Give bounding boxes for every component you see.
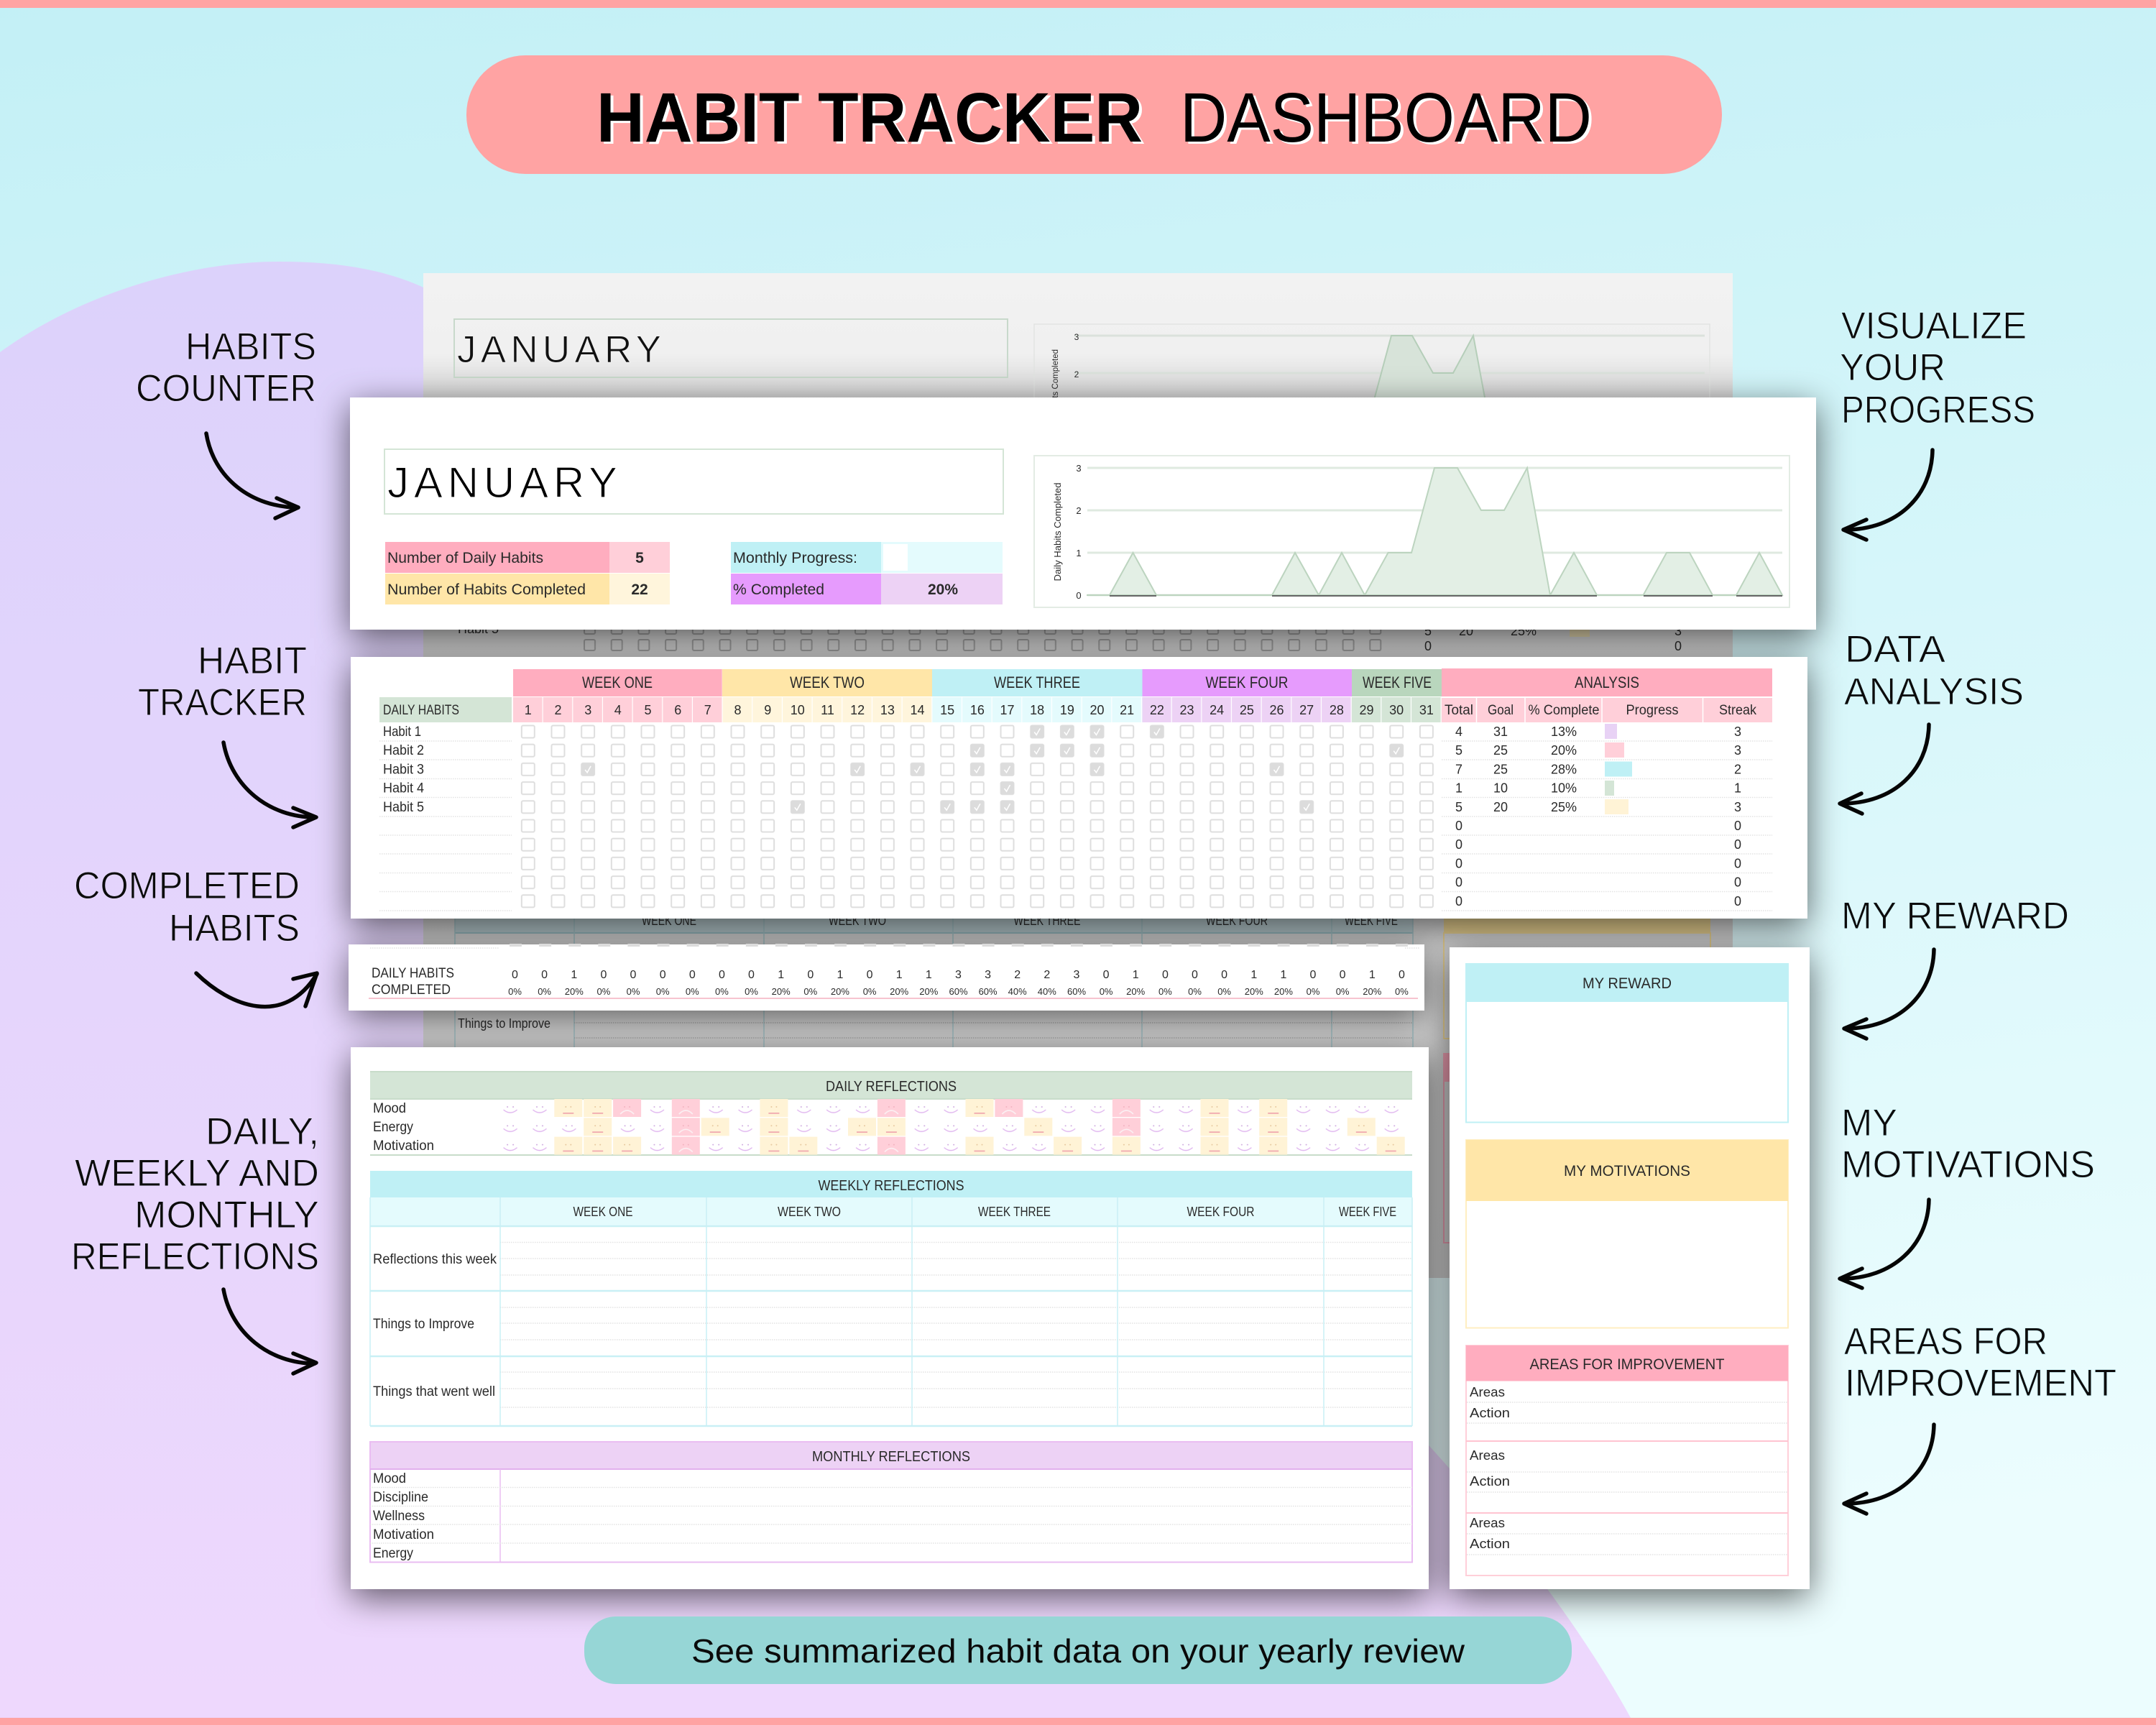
analysis values: 25% xyxy=(1551,800,1577,814)
week two header xyxy=(722,669,932,722)
analysis values: 1 xyxy=(1734,781,1741,795)
analysis values: 0 xyxy=(1455,857,1462,871)
analysis values: 4 xyxy=(1455,724,1462,739)
completed percentages: 60% xyxy=(979,986,998,997)
day numbers: 31 xyxy=(1419,703,1434,717)
day numbers: 7 xyxy=(704,703,711,717)
my reward box xyxy=(1466,964,1788,1123)
habit names: Habit 5 xyxy=(383,800,424,815)
back areas box xyxy=(1444,1054,1473,1243)
completed counts: 0 xyxy=(1192,969,1198,981)
habit names: Habit 2 xyxy=(383,743,424,758)
panel: habits counter and chart xyxy=(350,397,1816,630)
completed percentages: 0% xyxy=(1336,986,1350,997)
day numbers: 4 xyxy=(614,703,622,717)
completed counts: 0 xyxy=(1340,969,1346,981)
analysis values: 10 xyxy=(1493,781,1508,795)
analysis values: 3 xyxy=(1734,724,1741,739)
stat: monthly progress xyxy=(731,542,1003,573)
monthly reflections xyxy=(370,1442,1412,1563)
back things to improve row xyxy=(458,1016,1413,1038)
stat: number of habits completed xyxy=(385,574,670,604)
day numbers: 25 xyxy=(1240,703,1254,717)
daily reflections xyxy=(370,1072,1412,1156)
completed counts: 0 xyxy=(1162,969,1169,981)
back things to improve row: Things to Improve xyxy=(458,1016,550,1031)
analysis header xyxy=(1442,668,1772,722)
analysis values: 5 xyxy=(1455,743,1462,758)
weekly column headers: WEEK FIVE xyxy=(1339,1205,1396,1219)
completed counts: 1 xyxy=(837,969,843,981)
completed percentages: 0% xyxy=(1307,986,1320,997)
bottom border strip xyxy=(0,1718,2156,1725)
monthly row labels: Motivation xyxy=(373,1527,434,1542)
label: areas for improvement xyxy=(1844,1320,2116,1404)
completed percentages: 20% xyxy=(1363,986,1382,997)
areas and action labels: Areas xyxy=(1470,1516,1505,1530)
panel: reflections xyxy=(351,1047,1429,1589)
completed counts: 1 xyxy=(1280,969,1286,981)
completed percentages: 60% xyxy=(949,986,968,997)
mood energy motivation labels xyxy=(373,1101,434,1154)
completed row label: DAILY HABITS xyxy=(372,966,454,981)
completed percentages: 60% xyxy=(1067,986,1086,997)
day numbers: 27 xyxy=(1299,703,1314,717)
back habit rows: 0 xyxy=(1424,639,1432,653)
daily habits header xyxy=(379,697,512,722)
day numbers: 2 xyxy=(554,703,562,717)
completed counts: 0 xyxy=(512,969,518,981)
areas for improvement box: AREAS FOR IMPROVEMENT xyxy=(1529,1356,1725,1373)
day numbers: 17 xyxy=(1000,703,1015,717)
analysis values: 0 xyxy=(1455,819,1462,833)
weekly reflections xyxy=(370,1171,1412,1426)
stat: number of daily habits xyxy=(385,542,670,573)
stat: number of daily habits: Number of Daily Habits xyxy=(387,550,543,566)
completed counts: 0 xyxy=(807,969,814,981)
weekly column headers: WEEK THREE xyxy=(978,1205,1051,1219)
completed counts: 0 xyxy=(748,969,755,981)
label: my motivations: MY xyxy=(1841,1102,1897,1144)
completed percentages: 0% xyxy=(656,986,670,997)
back chart xyxy=(1034,324,1710,468)
label: habits counter: HABITS xyxy=(185,326,316,368)
day numbers: 10 xyxy=(791,703,805,717)
back habit rows: 0 xyxy=(1674,639,1682,653)
back chart: 3 xyxy=(1074,332,1079,342)
back weekly header: WEEK ONE xyxy=(642,914,696,928)
analysis header: ANALYSIS xyxy=(1575,673,1639,691)
day numbers: 6 xyxy=(674,703,681,717)
habit names: Habit 1 xyxy=(383,724,421,740)
analysis header: Goal xyxy=(1488,703,1514,718)
area chart: daily habits completed: 0 xyxy=(1076,590,1082,601)
title: habit tracker: HABIT TRACKER xyxy=(596,78,1143,157)
areas and action labels: Areas xyxy=(1470,1448,1505,1463)
back weekly header: WEEK TWO xyxy=(829,914,886,928)
completed percentages: 0% xyxy=(1158,986,1172,997)
habit names: Habit 4 xyxy=(383,781,424,796)
label: habits counter xyxy=(136,326,316,410)
back weekly header: WEEK FOUR xyxy=(1206,914,1268,928)
analysis values: 28% xyxy=(1551,762,1577,776)
day numbers: 15 xyxy=(940,703,954,717)
stat: number of habits completed: 22 xyxy=(631,581,648,598)
label: completed habits: COMPLETED xyxy=(74,865,300,907)
day numbers: 23 xyxy=(1179,703,1194,717)
completed counts: 3 xyxy=(955,969,962,981)
day numbers xyxy=(525,703,1434,717)
completed percentages: 0% xyxy=(508,986,522,997)
day numbers: 16 xyxy=(970,703,985,717)
completed percentages: 0% xyxy=(1395,986,1409,997)
analysis values: 25 xyxy=(1493,743,1508,758)
completed counts: 0 xyxy=(600,969,607,981)
analysis values: 2 xyxy=(1734,762,1741,776)
analysis values: 0 xyxy=(1734,819,1741,833)
mood energy motivation labels: Mood xyxy=(373,1101,406,1116)
panel: habit tracker xyxy=(351,657,1807,919)
arrow: my reward xyxy=(1844,949,1934,1039)
analysis values: 7 xyxy=(1455,762,1462,776)
monthly row labels xyxy=(373,1471,434,1561)
day numbers: 8 xyxy=(734,703,742,717)
week four header xyxy=(1143,669,1352,722)
analysis values: 0 xyxy=(1734,894,1741,908)
completed counts: 2 xyxy=(1044,969,1050,981)
day numbers: 14 xyxy=(910,703,925,717)
week two header: WEEK TWO xyxy=(790,673,865,691)
background spreadsheet sheet xyxy=(423,273,1733,1278)
completed percentages: 20% xyxy=(1245,986,1263,997)
analysis values: 0 xyxy=(1734,857,1741,871)
weekly column headers xyxy=(573,1205,1396,1219)
weekly row labels: Things to Improve xyxy=(373,1317,474,1332)
completed counts: 0 xyxy=(630,969,637,981)
daily reflections: DAILY REFLECTIONS xyxy=(826,1079,957,1095)
mood energy motivation labels: Motivation xyxy=(373,1138,434,1154)
label: data analysis: DATA xyxy=(1845,628,1946,671)
completed percentages: 20% xyxy=(565,986,584,997)
areas and action labels: Action xyxy=(1470,1537,1510,1551)
analysis values: 0 xyxy=(1734,837,1741,852)
panel: daily habits completed xyxy=(349,944,1424,1011)
completed counts: 0 xyxy=(719,969,725,981)
weekly column headers: WEEK ONE xyxy=(573,1205,632,1219)
completed counts: 0 xyxy=(660,969,666,981)
completed percentages: 20% xyxy=(772,986,791,997)
title pill xyxy=(466,55,1722,174)
arrow: data analysis xyxy=(1840,724,1929,814)
completed percentages: 40% xyxy=(1038,986,1056,997)
day numbers: 29 xyxy=(1359,703,1374,717)
area chart: daily habits completed xyxy=(1034,456,1789,607)
emoji rating grid xyxy=(496,1099,1406,1156)
weekly row labels: Things that went well xyxy=(373,1384,495,1399)
completed counts: 2 xyxy=(1014,969,1021,981)
completed percentages: 20% xyxy=(1274,986,1293,997)
analysis values: 0 xyxy=(1455,875,1462,890)
day numbers: 26 xyxy=(1269,703,1284,717)
arrow: habits counter xyxy=(206,433,298,518)
completed percentages: 20% xyxy=(919,986,939,997)
day numbers: 22 xyxy=(1150,703,1164,717)
completed percentages: 0% xyxy=(597,986,611,997)
week three header: WEEK THREE xyxy=(994,673,1080,691)
stat: number of daily habits: 5 xyxy=(635,550,644,566)
arrow: completed habits xyxy=(196,973,317,1007)
title: dashboard: DASHBOARD xyxy=(1180,78,1592,157)
areas and action labels: Action xyxy=(1470,1406,1510,1420)
completed percentages: 0% xyxy=(686,986,699,997)
label: reflections: DAILY, xyxy=(206,1110,319,1153)
areas and action labels: Action xyxy=(1470,1474,1510,1489)
completed counts: 1 xyxy=(778,969,784,981)
weekly row labels: Reflections this week xyxy=(373,1252,497,1267)
arrow: my motivations xyxy=(1840,1200,1929,1288)
analysis values: 25 xyxy=(1493,762,1508,776)
back reward box xyxy=(1444,919,1710,1039)
completed percentages: 0% xyxy=(715,986,729,997)
day numbers: 24 xyxy=(1210,703,1224,717)
label: habit tracker: TRACKER xyxy=(138,681,307,724)
daily habits header: DAILY HABITS xyxy=(383,703,459,718)
analysis values: 3 xyxy=(1734,800,1741,814)
analysis header: % Complete xyxy=(1528,703,1600,718)
completed percentages: 0% xyxy=(803,986,818,997)
day numbers: 28 xyxy=(1330,703,1344,717)
analysis values: 13% xyxy=(1551,724,1577,739)
label: habit tracker: HABIT xyxy=(198,640,307,682)
back habit rows: 20 xyxy=(1459,624,1473,638)
month box xyxy=(384,449,1003,514)
stat: monthly progress: Monthly Progress: xyxy=(733,550,857,566)
completed counts: 3 xyxy=(985,969,991,981)
day numbers: 13 xyxy=(880,703,895,717)
top border strip xyxy=(0,0,2156,8)
back chart: Daily Habits Completed xyxy=(1050,349,1060,436)
label: data analysis: ANALYSIS xyxy=(1844,671,2024,713)
day numbers: 30 xyxy=(1389,703,1404,717)
label: habit tracker xyxy=(138,640,307,724)
completed percentages: 20% xyxy=(890,986,909,997)
back habit rows: Habit 5 xyxy=(458,622,499,636)
completed counts: 1 xyxy=(1369,969,1376,981)
week one header xyxy=(513,669,722,722)
day numbers: 18 xyxy=(1030,703,1044,717)
completed counts: 0 xyxy=(1103,969,1110,981)
label: data analysis xyxy=(1844,628,2024,713)
back weekly header: WEEK THREE xyxy=(1013,914,1081,928)
monthly row labels: Wellness xyxy=(373,1509,425,1524)
back habit rows: 25% xyxy=(1511,624,1537,638)
weekly column headers: WEEK TWO xyxy=(778,1205,841,1219)
weekly reflections: WEEKLY REFLECTIONS xyxy=(818,1178,964,1194)
completed counts: 1 xyxy=(926,969,932,981)
weekly column headers: WEEK FOUR xyxy=(1187,1205,1255,1219)
day numbers: 12 xyxy=(850,703,865,717)
completed counts xyxy=(512,969,1405,981)
areas and action labels xyxy=(1470,1385,1510,1551)
completed percentages: 0% xyxy=(1100,986,1113,997)
progress bars xyxy=(1605,724,1632,814)
back chart: 2 xyxy=(1074,369,1079,380)
panel: reward motivations improvement xyxy=(1450,947,1810,1589)
analysis header: Streak xyxy=(1719,703,1756,718)
analysis values: 0 xyxy=(1734,875,1741,890)
week four header: WEEK FOUR xyxy=(1206,673,1288,691)
day numbers: 21 xyxy=(1120,703,1134,717)
completed percentages: 0% xyxy=(863,986,877,997)
bottom callout pill: See summarized habit data on your yearly review xyxy=(691,1632,1465,1670)
background lavender shape xyxy=(0,262,1631,1725)
analysis values: 3 xyxy=(1734,743,1741,758)
analysis values: 20% xyxy=(1551,743,1577,758)
arrow: reflections xyxy=(224,1289,316,1374)
analysis header: Total xyxy=(1445,703,1473,718)
stat: percent completed: % Completed xyxy=(733,581,824,598)
analysis values: 31 xyxy=(1493,724,1508,739)
habit names: Habit 3 xyxy=(383,762,424,778)
arrow: areas for improvement xyxy=(1844,1425,1934,1514)
completed counts: 0 xyxy=(1221,969,1227,981)
monthly reflections: MONTHLY REFLECTIONS xyxy=(812,1449,970,1465)
analysis values: 0 xyxy=(1455,837,1462,852)
label: reflections: WEEKLY AND xyxy=(75,1152,319,1195)
label: areas for improvement: AREAS FOR xyxy=(1844,1320,2047,1363)
day numbers: 20 xyxy=(1089,703,1105,717)
month name: JANUARY xyxy=(387,459,617,507)
completed percentages: 0% xyxy=(1217,986,1231,997)
completed percentages: 40% xyxy=(1008,986,1027,997)
back habit rows xyxy=(458,621,1682,654)
my motivations box xyxy=(1466,1140,1788,1328)
completed percentages: 20% xyxy=(1126,986,1146,997)
habit names xyxy=(383,724,424,815)
completed percentages: 0% xyxy=(627,986,640,997)
area chart: daily habits completed: 1 xyxy=(1076,548,1082,558)
label: completed habits: HABITS xyxy=(169,907,300,949)
completed percentages: 0% xyxy=(538,986,551,997)
completed counts: 0 xyxy=(1310,969,1317,981)
analysis values: 1 xyxy=(1455,781,1462,795)
day numbers: 19 xyxy=(1060,703,1074,717)
analysis header: Progress xyxy=(1626,703,1679,718)
completed row label xyxy=(372,966,454,998)
completed counts: 1 xyxy=(1250,969,1257,981)
weekly row labels xyxy=(373,1252,497,1399)
back habit rows: 5 xyxy=(1424,624,1432,638)
label: reflections xyxy=(71,1110,319,1278)
analysis values: 5 xyxy=(1455,800,1462,814)
week five header xyxy=(1352,669,1442,722)
day numbers: 1 xyxy=(525,703,532,717)
area chart: daily habits completed: 2 xyxy=(1076,505,1082,516)
back weekly header: WEEK FIVE xyxy=(1345,914,1398,928)
analysis values: 10% xyxy=(1551,781,1577,795)
completed counts: 0 xyxy=(867,969,873,981)
completed counts: 1 xyxy=(896,969,903,981)
day numbers: 3 xyxy=(584,703,591,717)
stat: percent completed: 20% xyxy=(928,581,958,598)
back habit rows: 3 xyxy=(1674,624,1682,638)
day numbers: 9 xyxy=(764,703,771,717)
my reward box: MY REWARD xyxy=(1583,975,1672,992)
stat: number of habits completed: Number of Habits Completed xyxy=(387,581,586,598)
completed counts: 0 xyxy=(1399,969,1405,981)
checkbox grid xyxy=(513,722,1442,911)
completed counts: 0 xyxy=(541,969,548,981)
completed percentages xyxy=(508,986,1409,997)
label: my motivations xyxy=(1841,1102,2095,1186)
mood energy motivation labels: Energy xyxy=(373,1120,413,1135)
label: my reward: MY REWARD xyxy=(1841,895,2069,937)
analysis values xyxy=(1455,724,1741,908)
completed counts: 0 xyxy=(689,969,696,981)
label: visualize your progress: VISUALIZE xyxy=(1841,305,2027,347)
back weekly header xyxy=(455,913,1413,933)
completed percentages: 20% xyxy=(831,986,849,997)
bottom callout pill xyxy=(584,1616,1572,1684)
area chart: daily habits completed: Daily Habits Completed xyxy=(1052,483,1063,581)
monthly row labels: Energy xyxy=(373,1546,413,1561)
arrow: visualize your progress xyxy=(1843,450,1932,540)
analysis values: 20 xyxy=(1493,800,1508,814)
label: completed habits xyxy=(74,865,300,949)
day numbers: 11 xyxy=(821,703,834,717)
week one header: WEEK ONE xyxy=(582,673,653,691)
completed counts: 1 xyxy=(1133,969,1139,981)
label: visualize your progress: YOUR xyxy=(1840,346,1945,389)
monthly row labels: Discipline xyxy=(373,1490,428,1505)
back january text: JANUARY xyxy=(457,328,661,371)
my motivations box: MY MOTIVATIONS xyxy=(1564,1163,1690,1179)
areas for improvement box xyxy=(1466,1346,1788,1576)
completed percentages: 0% xyxy=(745,986,758,997)
back january box xyxy=(454,319,1008,377)
week five header: WEEK FIVE xyxy=(1363,673,1432,691)
week three header xyxy=(932,669,1143,722)
day numbers: 5 xyxy=(644,703,652,717)
label: habits counter: COUNTER xyxy=(136,367,316,410)
stat: percent completed xyxy=(731,574,1003,604)
label: visualize your progress: PROGRESS xyxy=(1841,389,2035,431)
areas and action labels: Areas xyxy=(1470,1385,1505,1399)
area chart: daily habits completed: 3 xyxy=(1076,463,1082,474)
completed percentages: 0% xyxy=(1188,986,1202,997)
completed row label: COMPLETED xyxy=(372,983,451,998)
label: areas for improvement: IMPROVEMENT xyxy=(1845,1362,2116,1404)
arrow: habit tracker xyxy=(224,742,316,827)
label: my motivations: MOTIVATIONS xyxy=(1841,1144,2095,1186)
label: reflections: MONTHLY xyxy=(134,1194,319,1236)
analysis values: 0 xyxy=(1455,894,1462,908)
completed counts: 3 xyxy=(1074,969,1080,981)
label: visualize your progress xyxy=(1840,305,2035,431)
label: reflections: REFLECTIONS xyxy=(71,1236,319,1278)
completed counts: 1 xyxy=(571,969,577,981)
monthly row labels: Mood xyxy=(373,1471,406,1486)
